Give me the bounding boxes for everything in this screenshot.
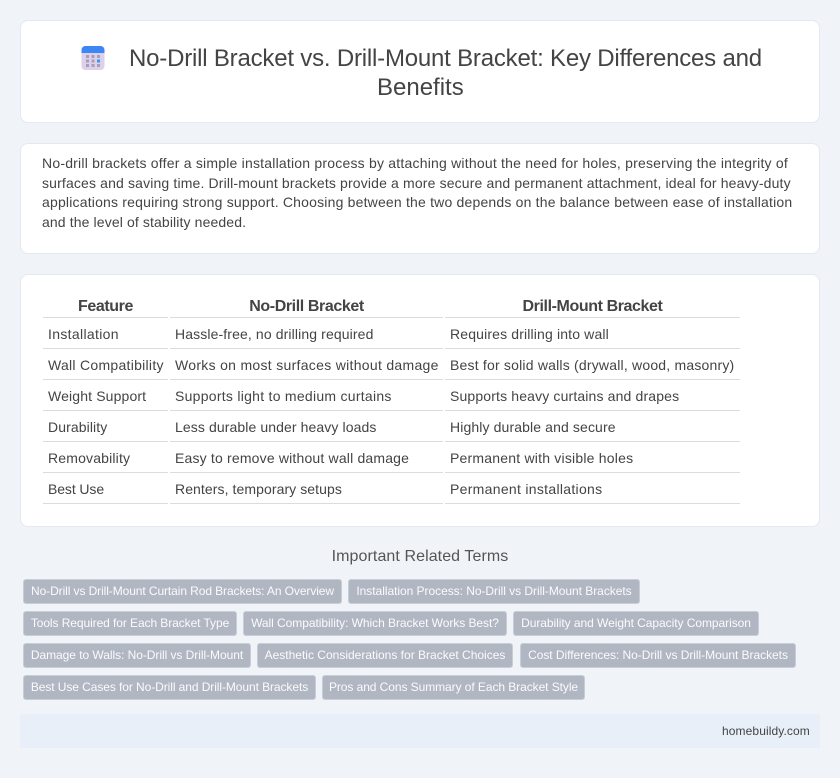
heading: related terms: Important Related Terms <box>332 548 508 565</box>
row: Best Use <box>48 481 602 497</box>
row: Installation: Installation <box>48 326 119 342</box>
row: Removability: Easy to remove without wall damage <box>175 450 409 466</box>
tags: related terms: Tools Required for Each Bracket Type <box>31 616 229 630</box>
tags: related terms: Aesthetic Considerations for Bracket Choices <box>265 648 505 662</box>
comparison table <box>43 298 740 504</box>
panel: comparison table card <box>20 274 820 527</box>
icon: calendar <box>82 46 104 70</box>
tags: related terms: Damage to Walls: No-Drill vs Drill-Mount <box>31 648 243 662</box>
tags: related terms: Installation Process: No-Drill vs Drill-Mount Brackets <box>356 584 632 598</box>
row: Best Use: Best Use <box>48 481 104 497</box>
tags: related terms <box>23 579 796 700</box>
row: Weight Support: Supports heavy curtains and drapes <box>450 388 679 404</box>
row: Durability: Durability <box>48 419 107 435</box>
footer text: homebuildy.com <box>722 724 810 738</box>
row: Weight Support: Weight Support <box>48 388 146 404</box>
row: Wall Compatibility: Wall Compatibility <box>48 357 164 373</box>
tags: related terms: Wall Compatibility: Which Bracket Works Best? <box>251 616 499 630</box>
panel: header card <box>20 20 820 123</box>
panel: intro text card <box>20 143 820 254</box>
row: Best Use: Renters, temporary setups <box>175 481 342 497</box>
tags: related terms: Pros and Cons Summary of Each Bracket Style <box>329 680 578 694</box>
tags: related terms: Cost Differences: No-Drill vs Drill-Mount Brackets <box>528 648 788 662</box>
title: No-Drill Bracket vs. Drill-Mount Bracket: Key Differences and <box>129 45 762 72</box>
row: Wall Compatibility <box>48 357 734 373</box>
table header row <box>78 298 663 315</box>
row: Wall Compatibility: Works on most surfaces without damage <box>175 357 439 373</box>
intro paragraph: and the level of stability needed. <box>42 214 246 230</box>
row: Durability <box>48 419 616 435</box>
row: Removability: Permanent with visible holes <box>450 450 633 466</box>
table header row: Feature <box>78 298 133 315</box>
row: Installation: Requires drilling into wall <box>450 326 609 342</box>
row: Weight Support <box>48 388 679 404</box>
table header row: No-Drill Bracket <box>249 298 364 315</box>
row: Installation <box>48 326 609 342</box>
row: Wall Compatibility: Best for solid walls (drywall, wood, masonry) <box>450 357 734 373</box>
tags: related terms: Best Use Cases for No-Drill and Drill-Mount Brackets <box>31 680 308 694</box>
row: Weight Support: Supports light to medium curtains <box>175 388 392 404</box>
title: Benefits <box>377 74 464 101</box>
row: Removability <box>48 450 633 466</box>
tags: related terms: Durability and Weight Capacity Comparison <box>521 616 751 630</box>
table header row: Drill-Mount Bracket <box>522 298 662 315</box>
row: Durability: Highly durable and secure <box>450 419 616 435</box>
row: Durability: Less durable under heavy loads <box>175 419 376 435</box>
row: Removability: Removability <box>48 450 130 466</box>
intro paragraph <box>42 155 792 230</box>
intro paragraph: surfaces and saving time. Drill-mount brackets provide a more secure and permanent attachment, ideal for heavy-duty <box>42 175 791 191</box>
footer bar <box>20 714 820 748</box>
tags: related terms: No-Drill vs Drill-Mount Curtain Rod Brackets: An Overview <box>31 584 334 598</box>
row: Best Use: Permanent installations <box>450 481 602 497</box>
title <box>129 45 762 101</box>
row: Installation: Hassle-free, no drilling required <box>175 326 374 342</box>
intro paragraph: applications requiring strong support. Choosing between the two depends on the balance between ease of installation <box>42 194 792 210</box>
intro paragraph: No-drill brackets offer a simple installation process by attaching without the need for holes, preserving the integrity of <box>42 155 788 171</box>
